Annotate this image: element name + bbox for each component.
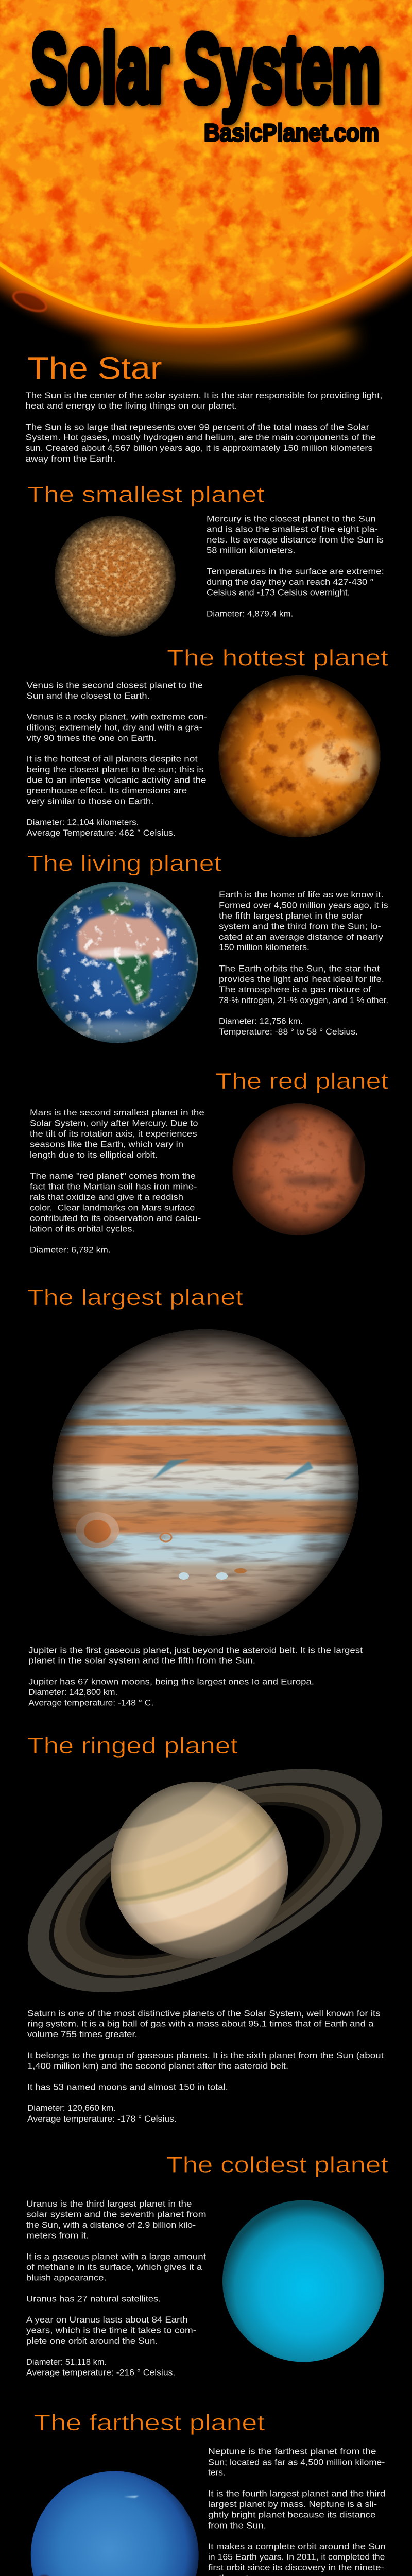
- text block: lation of its orbital cycles.: [30, 1224, 135, 1233]
- subtitle: BasicPlanet.com: [204, 120, 379, 147]
- text block: meters from it.: [26, 2231, 89, 2240]
- sun corona glow: [0, 0, 412, 363]
- heading: The red planet: [215, 1069, 388, 1094]
- planet: jupiter: [53, 1329, 358, 1636]
- text block: It is the fourth largest planet and the third: [208, 2489, 385, 2498]
- text block: [207, 514, 384, 618]
- text block: largest planet by mass. Neptune is a sli-: [208, 2500, 377, 2509]
- sun disc: [0, 0, 412, 328]
- planet: venus: [218, 675, 380, 837]
- text block: Temperatures in the surface are extreme:: [207, 567, 384, 577]
- text block: Mars is the second smallest planet in the: [30, 1108, 204, 1117]
- text block: length due to its elliptical orbit.: [30, 1150, 158, 1160]
- text block: Solar System, only after Mercury. Due to: [30, 1118, 198, 1128]
- text block: It makes a complete orbit around the Sun: [208, 2542, 386, 2551]
- text block: away from the Earth.: [26, 454, 115, 464]
- text block: system and the third from the Sun; lo-: [219, 922, 381, 931]
- text block: provides the light and heat ideal for life.: [219, 975, 384, 984]
- text block: ters.: [208, 2468, 226, 2477]
- text block: The Earth orbits the Sun, the star that: [219, 964, 380, 973]
- planet: uranus: [222, 2200, 384, 2362]
- text block: seasons like the Earth, which vary in: [30, 1140, 183, 1149]
- text block: It is a gaseous planet with a large amount: [26, 2252, 206, 2262]
- text block: ditions; extremely hot, dry and with a gra-: [27, 723, 202, 732]
- text block: 78-% nitrogen, 21-% oxygen, and 1 % other.: [219, 996, 388, 1005]
- text block: due to an intense volcanic activity and the: [27, 776, 207, 785]
- dark spot: [36, 2575, 53, 2576]
- text block: Venus is a rocky planet, with extreme con-: [27, 713, 207, 722]
- text block: very similar to those on Earth.: [27, 796, 153, 806]
- text block: 150 million kilometers.: [219, 943, 310, 952]
- text block: Jupiter is the first gaseous planet, just beyond the asteroid belt. It is the largest: [28, 1646, 363, 1655]
- text block: It has 53 named moons and almost 150 in total.: [27, 2082, 228, 2092]
- text block: vity 90 times the one on Earth.: [27, 734, 157, 743]
- text block: cated at an average distance of nearly: [219, 933, 384, 942]
- text block: ring system. It is a big ball of gas with a mass about 95.1 times that of Earth and a: [27, 2020, 374, 2029]
- heading: The Star: [28, 351, 162, 385]
- text block: The Sun is the center of the solar system. It is the star responsible for providing light,: [26, 391, 382, 400]
- text block: Diameter: 4,879.4 km.: [207, 609, 293, 618]
- heading: The hottest planet: [167, 645, 388, 671]
- planet: saturn: [28, 1769, 382, 1992]
- text block: plete one orbit around the Sun.: [26, 2336, 158, 2346]
- heading: The largest planet: [27, 1285, 243, 1310]
- text block: Average temperature: -178 ° Celsius.: [27, 2114, 177, 2124]
- text block: Average temperature: -216 ° Celsius.: [26, 2368, 175, 2378]
- text block: A year on Uranus lasts about 84 Earth: [26, 2315, 188, 2325]
- text block: System. Hot gases, mostly hydrogen and helium, are the main components of the: [26, 433, 376, 442]
- text block: It belongs to the group of gaseous planets. It is the sixth planet from the Sun (about: [27, 2051, 384, 2060]
- text block: the Sun, with a distance of 2.9 billion kilo-: [26, 2221, 196, 2230]
- text block: Uranus is the third largest planet in the: [26, 2199, 192, 2209]
- text block: Diameter: 51,118 km.: [26, 2358, 107, 2367]
- heading: The farthest planet: [33, 2410, 265, 2435]
- panel: the star: [26, 351, 382, 464]
- text block: [30, 1108, 204, 1255]
- text block: the fifth largest planet in the solar: [219, 911, 363, 921]
- text block: It is the hottest of all planets despite not: [27, 755, 198, 764]
- text block: fact that the Martian soil has iron mine-: [30, 1182, 197, 1191]
- header: sun and title: [0, 0, 412, 363]
- text block: the tilt of its rotation axis, it experiences: [30, 1129, 197, 1139]
- text block: of methane in its surface, which gives it a: [26, 2263, 202, 2272]
- text block: Jupiter has 67 known moons, being the largest ones Io and Europa.: [28, 1677, 314, 1686]
- heading: The coldest planet: [166, 2153, 388, 2177]
- panel: mercury: [27, 482, 384, 637]
- panel: saturn: [27, 1737, 384, 2124]
- text block: heat and energy to the living things on our planet.: [26, 401, 237, 411]
- text block: greenhouse effect. Its dimensions are: [27, 786, 187, 795]
- text block: color. Clear landmarks on Mars surface: [30, 1204, 195, 1213]
- text block: [28, 1646, 363, 1708]
- panel: uranus: [26, 2153, 388, 2378]
- text block: Diameter: 142,800 km.: [28, 1688, 117, 1697]
- text block: Celsius and -173 Celsius overnight.: [207, 588, 350, 598]
- panel: neptune: [31, 2410, 387, 2576]
- text block: solar system and the seventh planet from: [26, 2210, 206, 2219]
- text block: sun. Created about 4,567 billion years ago, it is approximately 150 million kilometers: [26, 444, 373, 453]
- text block: The name "red planet" comes from the: [30, 1172, 196, 1181]
- text block: rals that oxidize and give it a reddish: [30, 1193, 183, 1202]
- heading: The smallest planet: [27, 482, 265, 507]
- text block: volume 755 times greater.: [27, 2030, 138, 2039]
- text block: and is also the smallest of the eight pla-: [207, 525, 378, 534]
- text block: 58 million kilometers.: [207, 546, 295, 555]
- text block: contributed to its observation and calcu-: [30, 1214, 201, 1223]
- panel: venus: [27, 645, 388, 838]
- text block: during the day they can reach 427-430 °: [207, 578, 374, 587]
- planet: earth: [37, 882, 198, 1043]
- text block: Average temperature: -148 ° C.: [28, 1699, 153, 1708]
- text block: Venus is the second closest planet to the: [27, 681, 203, 690]
- planet: neptune: [31, 2471, 199, 2576]
- text block: Earth is the home of life as we know it.: [219, 890, 384, 900]
- text block: [208, 2447, 386, 2576]
- text block: Mercury is the closest planet to the Sun: [207, 514, 376, 523]
- text block: The atmosphere is a gas mixture of: [219, 985, 371, 994]
- text block: Neptune is the farthest planet from the: [208, 2447, 376, 2456]
- text block: [26, 391, 382, 464]
- text block: Sun; located as far as 4,500 million kilome-: [208, 2458, 385, 2467]
- text block: The Sun is so large that represents over 99 percent of the total mass of the Solar: [26, 422, 369, 432]
- text block: Uranus has 27 natural satellites.: [26, 2295, 161, 2304]
- planet: mars: [233, 1103, 365, 1235]
- text block: [219, 890, 388, 1037]
- heading: The living planet: [27, 851, 221, 876]
- text block: Diameter: 120,660 km.: [27, 2104, 116, 2113]
- saturn globe: [111, 1782, 288, 1959]
- text block: Formed over 4,500 million years ago, it is: [219, 901, 388, 910]
- text block: Saturn is one of the most distinctive planets of the Solar System, well known for its: [27, 2009, 381, 2018]
- text block: 1,400 million km) and the second planet after the asteroid belt.: [27, 2061, 288, 2071]
- text block: first orbit since its discovery in the ninete-: [208, 2563, 384, 2572]
- text block: bluish appearance.: [26, 2273, 107, 2282]
- rings: [0, 1722, 412, 2039]
- solar prominence: [11, 287, 49, 315]
- panel: mars: [30, 1069, 388, 1255]
- text block: planet in the solar system and the fifth from the Sun.: [28, 1656, 255, 1666]
- text block: being the closest planet to the sun; this is: [27, 765, 204, 774]
- text block: [27, 2009, 384, 2124]
- text block: years, which is the time it takes to com-: [26, 2326, 196, 2335]
- text block: in 165 Earth years. In 2011, it completed the: [208, 2553, 385, 2562]
- text block: Diameter: 12,756 km.: [219, 1017, 303, 1026]
- heading: The ringed planet: [27, 1733, 238, 1758]
- text block: ghtly bright planet because its distance: [208, 2511, 376, 2520]
- planet: mercury: [55, 516, 175, 637]
- great red spot: [76, 1512, 119, 1548]
- text block: [27, 681, 207, 838]
- panel: jupiter: [27, 1285, 363, 1708]
- panel: earth: [27, 851, 388, 1043]
- text block: Diameter: 6,792 km.: [30, 1245, 111, 1255]
- text block: from the Sun.: [208, 2521, 266, 2530]
- text block: Diameter: 12,104 kilometers.: [27, 818, 139, 827]
- text block: Temperature: -88 ° to 58 ° Celsius.: [219, 1027, 358, 1037]
- cloud streaks: [125, 2495, 139, 2499]
- text block: [26, 2199, 206, 2378]
- text block: nets. Its average distance from the Sun is: [207, 535, 384, 545]
- text block: Sun and the closest to Earth.: [27, 691, 150, 701]
- text block: Average Temperature: 462 ° Celsius.: [27, 828, 176, 838]
